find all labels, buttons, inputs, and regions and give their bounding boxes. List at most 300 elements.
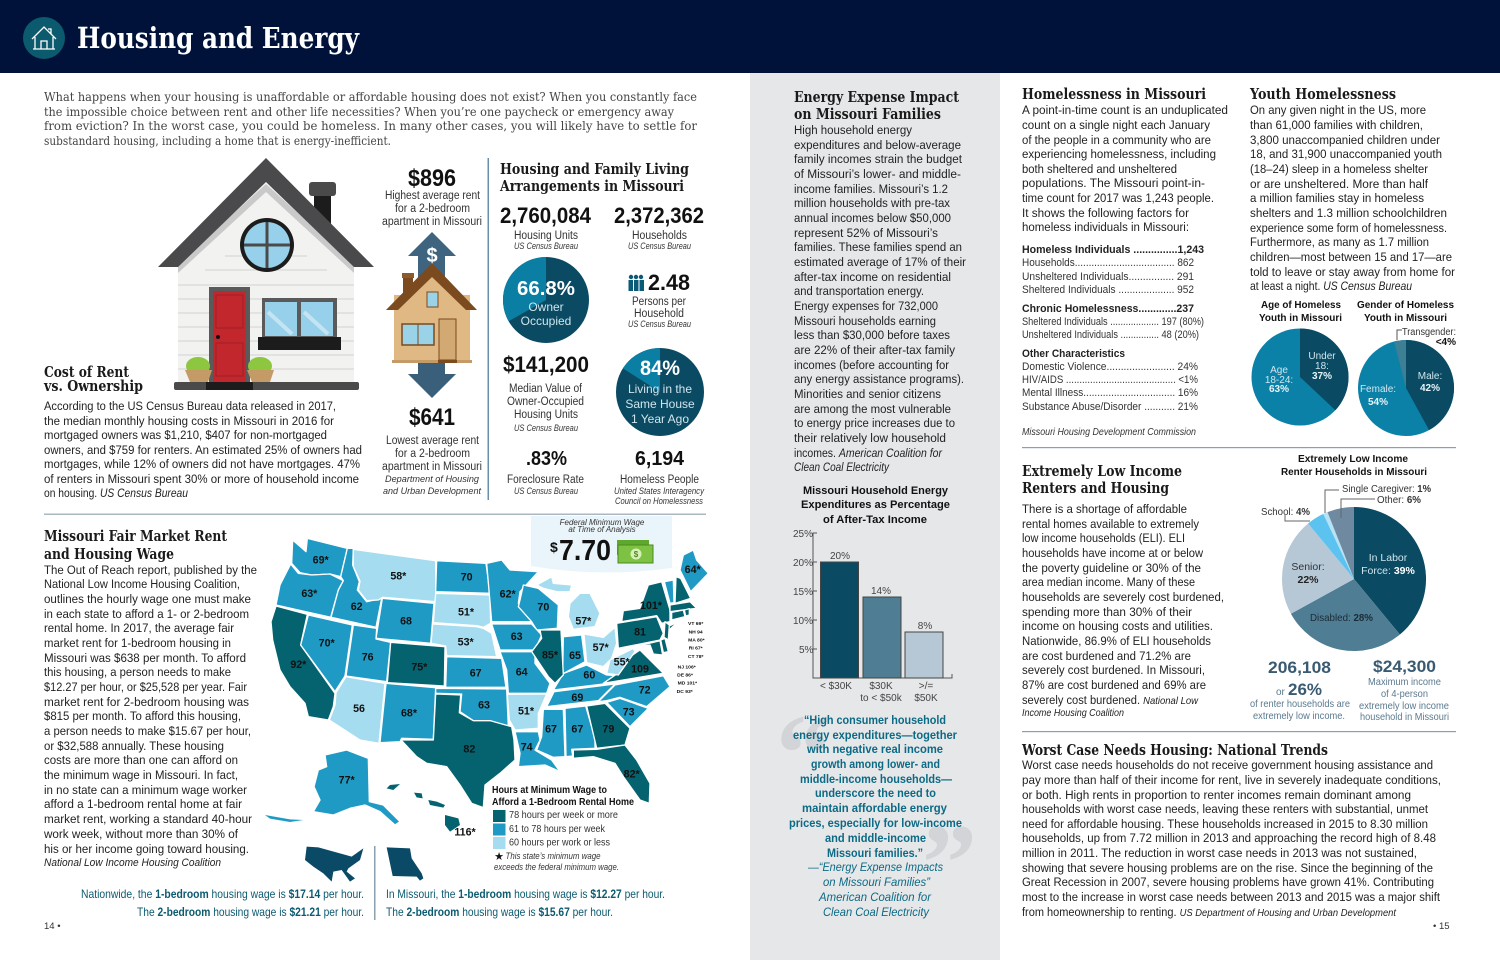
pie chart: extremely low income renter households: Other: 6% [1377,494,1422,506]
stat: median value: Owner-Occupied [507,396,584,408]
heading: fair market rent: Missouri Fair Market Rent [44,528,227,545]
text block: cost of rent [43,364,362,500]
map: hours at minimum wage by state: 79 [602,723,614,735]
text block: youth homelessness: told to leave or stay away from home for [1250,265,1455,279]
pull quote: “High consumer household [804,713,946,727]
callout: federal minimum wage: at Time of Analysis [568,525,636,534]
map: hours at minimum wage by state: 68* [401,707,418,719]
header banner [0,0,1500,73]
text block: energy expense impact: Minorities and senior citizens [794,387,941,401]
map: hours at minimum wage by state: 76 [362,651,374,663]
pie chart: extremely low income renter households: Extremely Low Income [1298,453,1408,465]
text block: worst case needs: households, up from 7.72 million in 2013 and approaching the record high of 8.48 [1022,831,1436,845]
pie chart: extremely low income renter households: School: 4% [1261,506,1311,518]
stat: homeless people: United States Interagency [614,486,705,497]
text block: worst case needs: Worst case needs households do not receive government housing assistance and [1022,758,1433,772]
map: hours at minimum wage by state: 51* [518,706,535,718]
heading: energy expense: Energy Expense Impact [794,89,959,106]
legend: hours at minimum wage: This state’s minimum wage [506,851,600,861]
text block: worst case needs: million in 2011. The reduction in worst case needs in 2013 was not sustained, [1022,846,1417,860]
icon: close quote mark: ” [922,802,977,924]
text block: fair market rent: work week, without more than 30% of [43,827,239,841]
pull quote: energy expenditures—together [793,728,957,742]
map: hours at minimum wage by state: 101* [640,600,663,612]
text block: fair market rent: afford a 1-bedroom rental home at fair [44,797,242,811]
text block: energy expense impact: High household energy [794,123,913,137]
bar chart: energy expenditures: 25% [793,529,813,540]
map: hours at minimum wage by state: MA 80* [688,637,705,643]
heading: low income renters: Extremely Low Income [1022,463,1182,480]
text block: fair market rent: market rent for 1-bedroom housing in [44,636,231,650]
text block: cost of rent: on housing. US Census Bureau [44,486,188,500]
text block: energy expense impact: Energy expenses for 732,000 [794,299,938,313]
text block: fair market rent: Missouri was $638 per month. To afford [44,651,246,665]
pie chart: age of homeless youth: Youth in Missouri [1259,312,1342,324]
bar chart: energy expenditures: 15% [793,587,813,598]
callout: federal minimum wage [531,516,672,573]
map: hours at minimum wage by state: 72 [639,685,651,697]
stat: median value: US Census Bureau [514,423,579,434]
stat: maximum income: $24,300 [1373,657,1436,676]
map: hours at minimum wage by state: 63 [478,700,490,712]
bar chart: energy expenditures: 14% [871,586,891,597]
text block: energy expense impact: any energy assistance programs). [794,372,964,386]
map: hours at minimum wage by state [265,538,708,839]
panel: housing and family living arrangements [499,161,705,507]
icon: Missouri silhouette [387,847,423,881]
text block: extremely low income renters: Nationwide, 86.9% of ELI households [1022,634,1211,648]
text block: youth homelessness: (18–24) sleep in a homeless shelter [1250,162,1428,176]
text block: youth homelessness: at least a night. US Census Bureau [1250,279,1412,293]
table: homeless factors: Homeless Individuals ...............1,243 [1022,244,1204,256]
pie: owner occupied: 66.8% [517,278,575,300]
bar chart: energy expenditures: 5% [799,645,814,656]
pie chart: gender of homeless youth: Gender of Homeless [1357,299,1454,311]
icon: large white house [158,158,374,390]
text block: energy expense impact: are 22% of their after-tax family [794,343,956,357]
map: hours at minimum wage by state: 67 [571,723,583,735]
title: Housing and Energy [77,21,360,55]
map: hours at minimum wage by state: 77* [339,775,356,787]
stat: renter households extremely low income: extremely low income. [1253,710,1345,722]
chart title: of After-Tax Income [823,514,927,526]
pie chart: extremely low income renter households: Renter Households in Missouri [1281,466,1427,478]
stat: renter households extremely low income: of renter households are [1250,698,1350,710]
text block: fair market rent: market rent for 2-bedroom housing was [44,695,249,709]
map: hours at minimum wage by state: 62 [351,601,363,613]
map: hours at minimum wage by state: 85* [542,650,559,662]
pie chart: gender of homeless youth: Transgender: [1402,327,1456,338]
text block: energy expense impact: after-tax income on residential [794,270,951,284]
stat: homeless people: Council on Homelessness [615,496,703,507]
pie chart: gender of homeless youth: Female: [1360,384,1396,395]
map: hours at minimum wage by state: 58* [390,570,407,582]
pie: owner occupied: Occupied [521,314,571,328]
text block: fair market rent: in no state can a minimum wage worker [44,783,247,797]
pull quote [776,692,977,924]
text block: homelessness in Missouri: time count for 2017 was 1,243 people. [1022,191,1214,205]
text block: youth homelessness [1249,86,1455,293]
text block: energy expense impact: income families. Missouri’s 1.2 [794,182,948,196]
map: hours at minimum wage by state: 69* [313,554,330,566]
bar chart: energy expenditures: 10% [793,616,813,627]
stat: households: Households [632,230,687,242]
pie: owner occupied: Owner [528,300,564,314]
text block: energy expense impact: their relatively low household [794,431,946,445]
map: hours at minimum wage by state: 65 [569,650,581,662]
text block: energy expense impact: incomes (before accounting for [794,358,949,372]
map: hours at minimum wage by state: DC 93* [677,689,693,695]
bar chart: energy expenditures: $30K [869,681,893,692]
map: hours at minimum wage by state: NJ 106* [678,664,696,670]
stat: renter households extremely low income: or [1276,687,1286,698]
pie chart: gender of homeless youth: <4% [1436,337,1456,348]
text block: energy expense impact: to energy price increases due to [794,416,955,430]
text block: worst case needs: pay more than half of their income for rent, live in severely inadequate conditions, [1022,773,1441,787]
stat: median value: $141,200 [503,352,589,377]
text block: fair market rent: the minimum wage in Missouri. In fact, [44,768,238,782]
text block: cost of rent: mortgaged owners was $1,210, $407 for non-mortgaged [44,428,327,442]
heading: fair market rent [44,528,227,563]
text block: homelessness in Missouri: A point-in-time count is an unduplicated [1022,103,1228,117]
stat: homeless people [614,448,705,507]
horizontal rule [1022,447,1456,448]
legend: hours at minimum wage: Hours at Minimum Wage to [492,784,607,796]
pie chart: extremely low income renter households: Senior: [1291,561,1325,573]
pie chart: age of homeless youth: 63% [1269,384,1289,395]
map: hours at minimum wage by state: CT 78* [688,654,703,660]
stat: households: US Census Bureau [628,241,692,252]
pie chart: extremely low income renter households [1261,453,1432,651]
text block: worst case needs: most to the increase in worst case needs between 2013 and 2015 was a major shift [1022,890,1441,904]
text block: youth homelessness: On any given night in the US, more [1250,103,1426,117]
text block: cost of rent: the median monthly housing costs in Missouri in 2016 for [44,414,334,428]
text block: extremely low income renters: area median income. Many of these [1022,575,1195,589]
stat: maximum income: extremely low income [1359,700,1449,712]
stat: highest rent: for a 2-bedroom [395,203,470,215]
table: homeless factors: Domestic Violence........................ 24% [1022,361,1198,373]
stat: renter households extremely low income [1250,658,1350,722]
heading: energy expense: on Missouri Families [794,106,941,123]
text block: extremely low income renters: income on housing costs and utilities. [1022,619,1213,633]
heading: homelessness in Missouri: Homelessness in Missouri [1022,86,1206,103]
panel: gray centre column background [750,73,1000,960]
text block: extremely low income renters [1022,463,1224,719]
table: homeless factors: Unsheltered Individuals ............... 48 (20%) [1022,329,1199,341]
map: hours at minimum wage by state: 70 [461,572,473,584]
pie chart: age of homeless youth: 37% [1312,371,1332,382]
heading: fair market rent: and Housing Wage [44,546,174,563]
icon: house in circle [23,17,65,59]
pull quote: prices, especially for low-income [789,816,962,830]
table: homeless factors: Sheltered Individuals .................... 952 [1022,284,1194,296]
pie chart: age of homeless youth: Under [1308,351,1336,362]
text block: homelessness in Missouri: of the people in a community who are [1022,133,1211,147]
page number left: 14 • [44,921,61,932]
table: homeless factors: Chronic Homelessness.............237 [1022,303,1194,315]
map: hours at minimum wage by state: DE 86* [677,673,693,679]
map: hours at minimum wage by state: 82* [624,769,641,781]
pie chart: gender of homeless youth: 54% [1368,397,1388,408]
bar chart: energy expenditures: 20% [830,551,850,562]
table: homeless factors: Missouri Housing Development Commission [1022,427,1196,438]
text block: worst case needs: households with worst case needs, leaving these renters with substantial, unmet [1022,802,1429,816]
map: hours at minimum wage by state: 74 [521,741,533,753]
text: Missouri housing wage [386,887,665,919]
heading: low income renters: Renters and Housing [1022,480,1169,497]
legend: hours at minimum wage: Afford a 1-Bedroom Rental Home [492,796,634,808]
heading: worst case needs: Worst Case Needs Housing: National Trends [1021,742,1328,759]
map: hours at minimum wage by state: VT 69* [688,621,703,627]
map: hours at minimum wage by state: 75* [411,661,428,673]
text block: extremely low income renters: rental homes available to extremely [1022,517,1200,531]
stat: foreclosure rate [507,448,584,497]
text block: energy expense impact: are among the most vulnerable [794,402,951,416]
text block: energy expense impact: Missouri households earning [794,314,936,328]
vertical divider [374,846,376,920]
text block: cost of rent: mortgages, while 12% of owners did not have mortgages. 47% [44,457,360,471]
text block: fair market rent: $815 per month. To afford this housing, [44,709,241,723]
text: Missouri housing wage: In Missouri, the 1-bedroom housing wage is $12.27 per hour. [386,887,665,901]
text block: energy expense impact: less than $30,000 before taxes [794,328,950,342]
legend: hours at minimum wage: exceeds the federal minimum wage. [494,862,619,872]
vertical divider [488,158,489,500]
map: hours at minimum wage by state: 69 [571,692,583,704]
text block: energy expense impact: estimated average of 17% of their [794,255,966,269]
map: hours at minimum wage by state: 81 [634,627,646,639]
pull quote: growth among lower- and [811,757,940,771]
text block: fair market rent: rental home. In 2017, the average fair [44,621,234,635]
stat: lowest rent: Department of Housing [385,474,480,485]
text block: youth homelessness: 18, and 31,900 unaccompanied youth [1250,147,1442,161]
map: hours at minimum wage by state: 63* [301,588,318,600]
pie chart: extremely low income renter households: Force: 39% [1361,565,1416,577]
stat: lowest rent: Lowest average rent [386,435,480,447]
map: hours at minimum wage by state: RI 67* [689,646,703,652]
pie chart: gender of homeless youth [1357,299,1456,436]
pie chart: age of homeless youth: Age [1270,365,1288,376]
icon: US silhouette [305,847,363,882]
text block: energy expense impact: million households with pre-tax [794,196,951,210]
text block: homelessness in Missouri: homeless individuals in Missouri: [1022,220,1189,234]
pie chart: extremely low income renter households: 22% [1297,574,1319,586]
icon: dollar bills: $ [634,550,639,559]
text block: extremely low income renters: severely cost burdened. National Low [1022,693,1199,707]
text block: energy expense impact: annual incomes below $50,000 [794,211,951,225]
map: hours at minimum wage by state: 82 [463,744,475,756]
text block: worst case needs: or both. High rents in proportion to renter incomes remain dominant among [1022,788,1411,802]
pie chart: extremely low income renter households: Single Caregiver: 1% [1342,483,1432,495]
text block: energy expense impact: families. These families spend an [794,240,962,254]
text block: youth homelessness: than 61,000 families with children, [1250,118,1423,132]
text block: youth homelessness: or are unsheltered. More than half [1250,177,1429,191]
pie chart: age of homeless youth: Age of Homeless [1261,299,1341,311]
map: hours at minimum wage by state: 67 [545,723,557,735]
heading: cost of rent: Cost of Rent [44,364,129,381]
legend: hours at minimum wage [492,784,634,872]
icon: dollar bills [617,540,653,563]
pull quote: Clean Coal Electricity [823,905,930,919]
map: hours at minimum wage by state: 57* [593,642,610,654]
text block: extremely low income renters: There is a shortage of affordable [1022,502,1187,516]
stat: homeless people: 6,194 [635,448,685,470]
text block: youth homelessness: a million families stay in homeless [1250,191,1424,205]
bar chart: energy expenditures: 8% [918,621,932,632]
text block: extremely low income renters: spending more than 30% of their [1022,605,1192,619]
text block: extremely low income renters: 87% are cost burdened and 69% are [1022,678,1206,692]
text block: energy expense impact: and transportation energy. [794,284,924,298]
stat: maximum income: of 4-person [1381,688,1428,700]
text block: worst case needs: showing that severe housing problems are on the rise. Since the beginning of the [1022,861,1433,875]
stat: highest rent: $896 [408,165,456,192]
stat: renter households extremely low income: 206,108 [1268,658,1331,677]
legend: hours at minimum wage: ★ [494,851,504,863]
map: hours at minimum wage by state: 64 [516,666,528,678]
text block: worst case needs [1021,742,1441,919]
text block: extremely low income renters: the poverty guideline or 30% of the [1022,561,1201,575]
text block: extremely low income renters: are cost burdened and 71.2% are [1022,649,1191,663]
text block: fair market rent: in each state to afford a 1- or 2-bedroom [44,607,249,621]
pie chart: extremely low income renter households: Disabled: 28% [1310,612,1374,624]
map: hours at minimum wage by state: 116* [454,827,477,839]
text block: cost of rent: According to the US Census Bureau data released in 2017, [44,399,336,413]
text block: fair market rent: a person needs to make $15.67 per hour, [44,724,251,738]
stat: housing units: US Census Bureau [514,241,579,252]
stat: foreclosure rate: US Census Bureau [514,486,579,497]
stat: households [614,203,704,252]
map: hours at minimum wage by state: 51* [458,606,475,618]
map: hours at minimum wage by state: 70 [537,601,549,613]
bar chart: energy expenditures: < $30K [820,681,852,692]
pull quote: underscore the need to [815,786,936,800]
stat: median value [503,352,589,434]
stat: lowest rent: for a 2-bedroom [395,448,470,460]
pull quote: middle-income households— [800,772,953,786]
text block: fair market rent: this housing, a person needs to make [44,665,231,679]
pull quote: with negative real income [806,742,943,756]
heading: housing arrangements: Housing and Family Living [500,161,689,178]
pie chart: age of homeless youth: 18-24: [1265,375,1293,386]
text block: youth homelessness: shelters and 1.3 million schoolchildren [1250,206,1447,220]
stat: lowest rent [382,404,482,497]
icon: open quote mark: “ [776,692,831,814]
bar chart: energy expenditures: to < $50k [860,693,903,704]
text block: extremely low income renters: low income households (ELI). ELI [1022,531,1185,545]
stat: median value: Median Value of [509,383,583,395]
icon: people and persons per household [628,270,692,330]
table: homeless factors [1022,244,1204,438]
pie: same house: Same House [625,397,695,411]
map: hours at minimum wage by state: NH 94 [689,629,703,635]
map: hours at minimum wage by state: 62* [500,589,517,601]
legend: hours at minimum wage: 60 hours per work or less [509,836,610,848]
map: hours at minimum wage by state: 70* [319,637,336,649]
pie: same house [616,348,704,436]
icon: people and persons per household: US Census Bureau [628,319,692,330]
pull quote: Missouri families.” [827,846,923,860]
text block: extremely low income renters: households are severely cost burdened, [1022,590,1224,604]
horizontal rule [1022,731,1456,732]
map: hours at minimum wage by state: 53* [458,636,475,648]
map: hours at minimum wage by state: 68 [400,615,412,627]
text block: fair market rent: outlines the hourly wage one must make [44,592,251,606]
text block: homelessness in Missouri: It shows the following factors for [1022,206,1189,220]
stat: maximum income: household in Missouri [1360,711,1449,723]
text block: fair market rent: his or her income going toward housing. [44,842,249,856]
stat: foreclosure rate: Foreclosure Rate [507,474,584,486]
stat: foreclosure rate: .83% [526,448,567,470]
pie chart: extremely low income renter households: In Labor [1369,552,1408,564]
intro paragraph: the impossible choice between rent and other life necessities? When you’re one paycheck or emergency away [44,105,674,119]
legend: hours at minimum wage: 78 hours per week or more [509,809,618,821]
text: Missouri housing wage: The 2-bedroom housing wage is $15.67 per hour. [386,905,613,919]
text: national housing wage [81,887,364,919]
intro paragraph [44,90,697,148]
text block: energy expense impact: expenditures and below-average [794,138,961,152]
text block: fair market rent: National Low Income Housing Coalition, [44,577,240,591]
text block: fair market rent: National Low Income Housing Coalition [44,857,221,869]
stat: lowest rent: $641 [409,404,455,431]
text: national housing wage: The 2-bedroom housing wage is $21.21 per hour. [137,905,364,919]
pie: same house: Living in the [628,382,692,396]
map: hours at minimum wage by state: 56 [353,703,365,715]
map: hours at minimum wage by state: 55* [614,657,631,669]
heading: housing arrangements [499,161,689,195]
stat: highest rent: Highest average rent [385,190,481,202]
stat: highest rent: apartment in Missouri [382,216,482,228]
stat: maximum income [1359,657,1449,723]
icon: people and persons per household: 2.48 [648,270,690,295]
stat: median value: Housing Units [514,409,578,421]
text block: fair market rent: The Out of Reach report, published by the [44,563,257,577]
chart title: Missouri Household Energy [803,485,949,497]
chart title: Expenditures as Percentage [801,499,950,511]
callout: federal minimum wage: 7.70 [559,535,611,567]
stat: highest rent [382,165,482,228]
text block: energy expense impact: represent 52% of Missouri’s [794,226,938,240]
text block: energy expense impact: incomes. American Coalition for [794,446,943,460]
bar chart: energy expenditures: >/= [919,681,933,692]
table: homeless factors: HIV/AIDS ......................................... <1% [1022,374,1198,386]
pie chart: gender of homeless youth: 42% [1420,383,1440,394]
callout: federal minimum wage: Federal Minimum Wage [560,518,645,527]
text block: cost of rent: of renters in Missouri spent 30% or more of household income [44,472,359,486]
pull quote: maintain affordable energy [802,801,947,815]
stat: households: 2,372,362 [614,203,704,228]
text block: fair market rent: market rent, working a standard 40-hour [44,812,252,826]
pie chart: gender of homeless youth: Male: [1418,371,1442,382]
heading: housing arrangements: Arrangements in Missouri [499,178,684,195]
text block: fair market rent: $12.27 per hour, or $25,528 per year. Fair [44,680,247,694]
heading: cost of rent [43,364,143,395]
stat: maximum income: Maximum income [1368,676,1441,688]
text: national housing wage: Nationwide, the 1-bedroom housing wage is $17.14 per hour. [81,887,364,901]
intro paragraph: What happens when your housing is unaffordable or affordable housing does not exist? When you constantly face [44,90,697,104]
table: homeless factors: Substance Abuse/Disorder ........... 21% [1022,401,1198,413]
text block: fair market rent: or $32,588 annually. These housing [44,739,224,753]
stat: lowest rent: apartment in Missouri [382,461,482,473]
heading: cost of rent: vs. Ownership [43,378,143,395]
text block: extremely low income renters: severely cost burdened. In Missouri, [1022,663,1205,677]
callout: federal minimum wage: $ [550,539,558,555]
map: hours at minimum wage by state: 64* [685,564,702,576]
stat: housing units [500,203,592,252]
text block: energy expense impact: Clean Coal Electricity [794,460,890,474]
text block: homelessness in Missouri: populations. The Missouri point-in- [1022,176,1205,190]
pull quote: American Coalition for [818,890,932,904]
text block: youth homelessness: Furthermore, as many as 1.7 million [1250,235,1429,249]
text block: homelessness in Missouri [1022,86,1228,234]
